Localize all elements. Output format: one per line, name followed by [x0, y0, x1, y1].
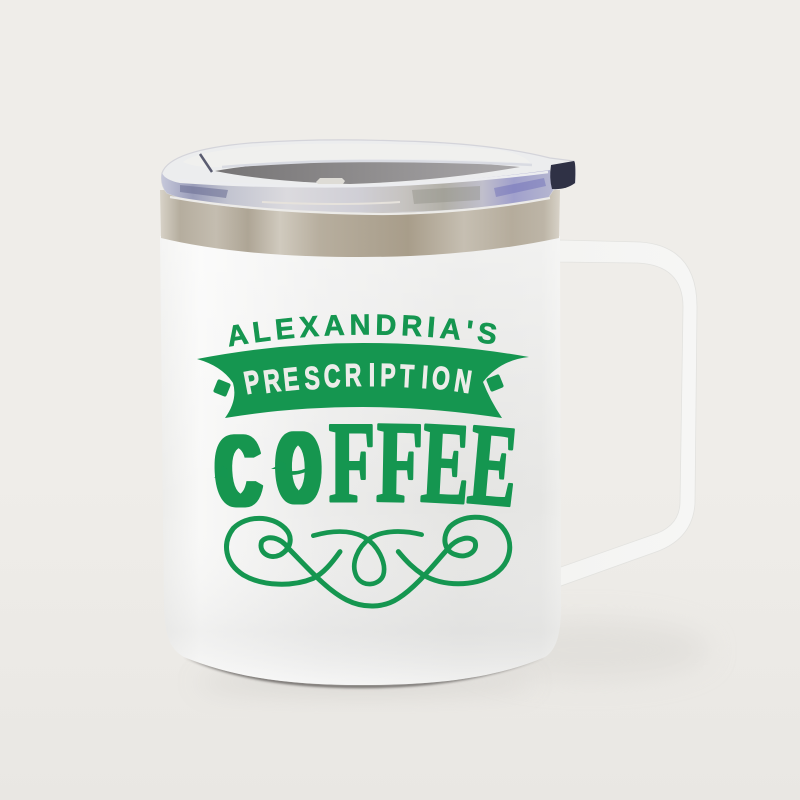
banner text: PRESCRIPTION: E	[282, 361, 301, 398]
printed text: COFFEE: C	[214, 413, 262, 529]
table shadow	[184, 620, 710, 690]
banner text: PRESCRIPTION	[241, 357, 474, 401]
lid tab	[550, 161, 575, 189]
printed text: COFFEE: E	[419, 398, 473, 528]
banner text: PRESCRIPTION: I	[369, 357, 375, 393]
printed banner	[197, 343, 529, 418]
banner text: PRESCRIPTION: P	[380, 357, 396, 393]
banner text: PRESCRIPTION: R	[261, 362, 283, 400]
printed flourish	[227, 517, 510, 606]
mug body	[160, 236, 561, 685]
banner text: PRESCRIPTION: P	[241, 363, 263, 401]
banner text: PRESCRIPTION: I	[421, 359, 429, 395]
printed text: COFFEE: E	[464, 399, 523, 531]
mug handle	[558, 240, 697, 587]
banner text: PRESCRIPTION: N	[452, 362, 474, 400]
banner text: PRESCRIPTION: T	[399, 358, 415, 394]
banner text: PRESCRIPTION: C	[323, 358, 341, 394]
transparent lid	[162, 140, 575, 214]
banner text: PRESCRIPTION: O	[430, 359, 452, 397]
printed text: COFFEE: F	[329, 398, 375, 527]
banner text: PRESCRIPTION: S	[303, 360, 321, 396]
banner text: PRESCRIPTION: R	[344, 357, 362, 393]
printed text: COFFEE: O	[276, 411, 320, 526]
steel rim band	[160, 190, 560, 257]
printed text: ALEXANDRIA'S: ALEXANDRIA'S	[229, 314, 496, 347]
printed text: COFFEE: F	[375, 398, 424, 527]
printed text: COFFEE	[214, 398, 523, 531]
